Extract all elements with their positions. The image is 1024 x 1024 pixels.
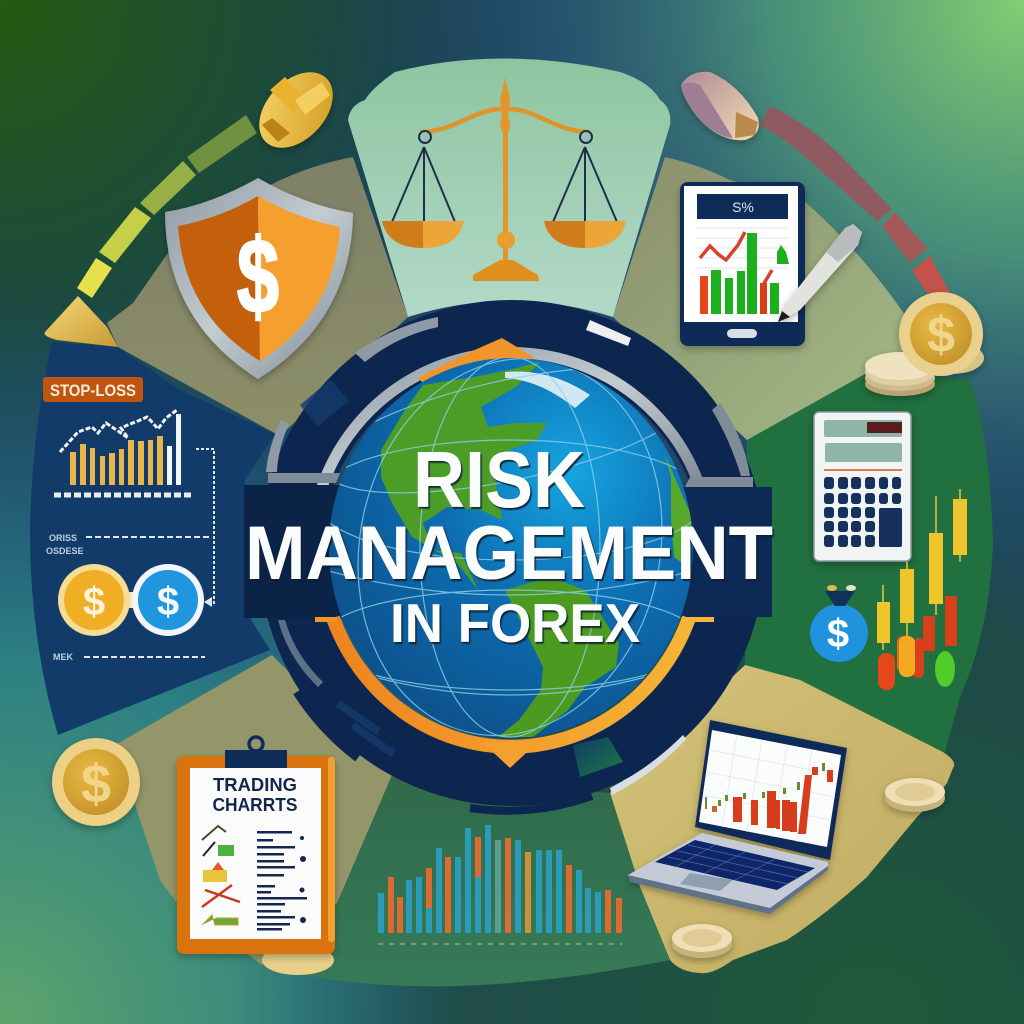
icon: gold coin right <box>885 778 945 812</box>
right risk arc segments <box>760 106 950 293</box>
icon: gold coin left <box>52 738 140 826</box>
icon: balance scale <box>382 77 626 281</box>
icon: money bag: $ <box>827 612 849 656</box>
bottom bar chart <box>378 825 622 944</box>
icon: laptop with trading chart <box>628 720 847 914</box>
dashed connector arrow <box>196 449 214 605</box>
icon: tablet with chart and pen: S% <box>732 199 754 215</box>
panel: right green wedge <box>745 373 993 752</box>
panel: bottom-right tan wedge <box>610 665 954 973</box>
central ring <box>266 317 753 811</box>
icon: money bag <box>810 585 868 662</box>
continent: north america <box>381 362 547 590</box>
icon: calculator <box>814 412 911 561</box>
stop-loss bar and line chart <box>54 410 191 495</box>
mini text lines <box>257 831 307 930</box>
title text: MANAGEMENT <box>245 511 773 596</box>
panel: top mint wedge <box>348 58 670 317</box>
icon: copper bowl top-right <box>681 72 759 140</box>
title band <box>244 485 772 618</box>
stop-loss label: STOP-LOSS <box>50 381 136 400</box>
icon: gold coin stack: $ <box>927 307 955 363</box>
icon: clipboard with trading charts: CHARRTS <box>212 795 298 815</box>
icon: clipboard with trading charts: TRADING <box>213 775 297 795</box>
continent: east landmass <box>664 453 692 567</box>
caption lines: ORISS <box>49 533 77 543</box>
title text: IN FOREX <box>390 592 640 654</box>
panel: bottom green wedge <box>262 775 670 986</box>
panel: top-right khaki wedge <box>613 157 905 440</box>
globe with orange frame <box>314 330 714 768</box>
candlestick chart <box>877 489 967 690</box>
continent: south america <box>498 577 619 737</box>
caption lines: OSDESE <box>46 546 84 556</box>
icon: shield with dollar: $ <box>237 218 279 335</box>
panel: bottom-left khaki wedge <box>115 655 392 965</box>
icon: clipboard with trading charts <box>177 737 335 975</box>
title text <box>245 435 773 654</box>
icon: gold cone at arc start <box>44 296 118 347</box>
panel: top-left khaki wedge <box>107 157 408 436</box>
icon: gold coin bottom <box>672 924 732 958</box>
caption lines: MEK <box>53 652 74 662</box>
caption lines <box>46 533 212 662</box>
title text: RISK <box>413 435 585 524</box>
stop-loss label <box>43 377 143 402</box>
panel: left navy wedge with stop-loss <box>30 342 275 735</box>
two linked currency coins <box>58 564 204 636</box>
left progress arc segments <box>77 115 257 298</box>
two linked currency coins: $ <box>83 580 105 624</box>
pen <box>778 224 862 322</box>
icon: gold coin left: $ <box>81 754 111 814</box>
mini charts <box>202 826 240 925</box>
icon: gold coin stack <box>865 292 984 396</box>
icon: shield with dollar <box>165 178 353 379</box>
icon: gold helmet top-left <box>245 58 347 162</box>
icon: tablet with chart and pen <box>680 182 862 346</box>
two linked currency coins: $ <box>157 580 179 624</box>
